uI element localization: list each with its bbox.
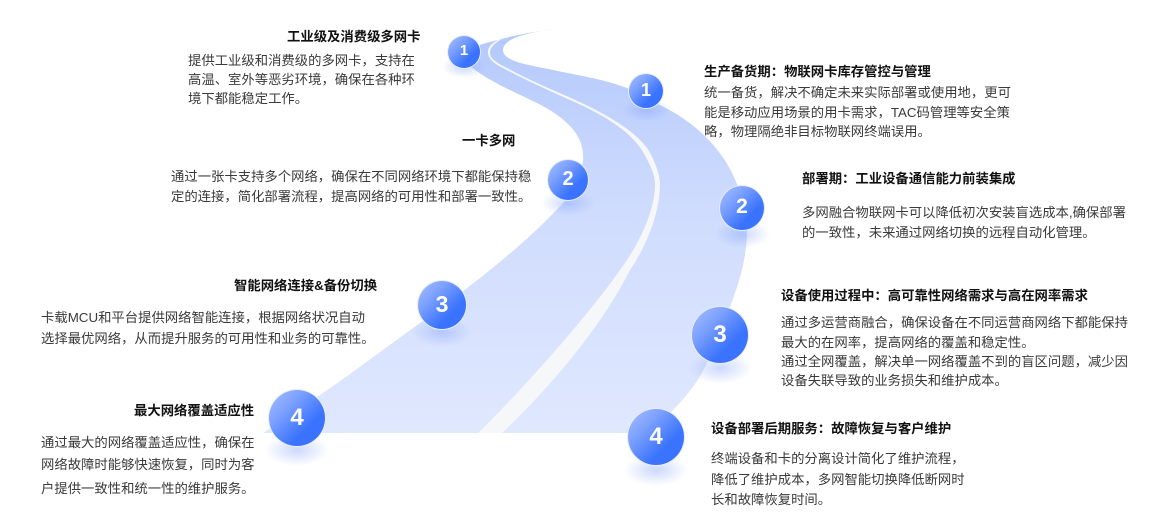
marker: right 4	[628, 409, 684, 465]
text block: 工业级及消费级多网卡: 工业级及消费级多网卡	[287, 29, 420, 44]
marker: left 3	[418, 281, 466, 329]
marker: right 2: 2	[736, 195, 748, 218]
text block: 工业级及消费级多网卡: 境下都能稳定工作。	[188, 91, 308, 106]
text block: 部署期: 多网融合物联网卡可以降低初次安装盲选成本,确保部署	[802, 205, 1126, 220]
text block: 智能网络连接&备份切换: 卡载MCU和平台提供网络智能连接，根据网络状况自动	[41, 310, 365, 325]
text block: 智能网络连接&备份切换	[41, 278, 377, 346]
text block: 最大网络覆盖适应性	[41, 403, 255, 496]
text block: 生产备货期: 生产备货期：物联网卡库存管控与管理	[704, 64, 931, 79]
text block: 部署期: 的一致性，未来通过网络切换的远程自动化管理。	[802, 225, 1096, 240]
text block: 设备使用过程中: 通过全网覆盖，解决单一网络覆盖不到的盲区问题，减少因	[781, 354, 1128, 369]
text block: 生产备货期: 统一备货，解决不确定未来实际部署或使用地，更可	[704, 85, 1011, 100]
marker shadows	[270, 62, 766, 484]
text block: 一卡多网	[171, 133, 531, 204]
text block: 最大网络覆盖适应性: 通过最大的网络覆盖适应性，确保在	[41, 435, 255, 450]
marker: right 1: 1	[641, 80, 651, 100]
text block: 工业级及消费级多网卡: 提供工业级和消费级的多网卡，支持在	[188, 53, 415, 68]
text block: 一卡多网: 定的连接，简化部署流程，提高网络的可用性和部署一致性。	[171, 189, 531, 204]
text block: 生产备货期: 略，物理隔绝非目标物联网终端误用。	[704, 124, 931, 139]
text block: 部署期	[802, 171, 1126, 240]
text block: 设备使用过程中	[781, 288, 1128, 388]
text block: 生产备货期: 能是移动应用场景的用卡需求，TAC码管理等安全策	[704, 105, 1010, 120]
text block: 部署期: 部署期：工业设备通信能力前装集成	[802, 171, 1016, 186]
text block: 设备使用过程中: 通过多运营商融合，确保设备在不同运营商网络下都能保持	[781, 315, 1128, 330]
text block: 工业级及消费级多网卡: 高温、室外等恶劣环境，确保在各种环	[188, 72, 415, 87]
marker: left 2: 2	[562, 168, 574, 190]
text block: 设备使用过程中: 最大的在网率，提高网络的覆盖和稳定性。	[781, 335, 1035, 350]
marker: right 2	[720, 186, 764, 230]
text block: 工业级及消费级多网卡	[188, 29, 420, 106]
marker: right 3	[692, 307, 748, 363]
marker: left 4	[269, 390, 325, 446]
text block: 一卡多网: 通过一张卡支持多个网络，确保在不同网络环境下都能保持稳	[171, 169, 531, 184]
marker: left 1: 1	[460, 42, 468, 59]
marker: right 3: 3	[713, 321, 727, 348]
marker: left 4: 4	[290, 404, 304, 431]
text block: 设备部署后期服务: 设备部署后期服务：故障恢复与客户维护	[711, 421, 951, 436]
marker: right 4: 4	[649, 423, 663, 450]
text block: 智能网络连接&备份切换: 选择最优网络，从而提升服务的可用性和业务的可靠性。	[41, 331, 375, 346]
marker: left 3: 3	[436, 291, 448, 317]
text block: 最大网络覆盖适应性: 户提供一致性和统一性的维护服务。	[41, 481, 255, 496]
text block: 生产备货期	[704, 64, 1011, 139]
text block: 最大网络覆盖适应性: 最大网络覆盖适应性	[134, 403, 254, 418]
text block: 智能网络连接&备份切换: 智能网络连接&备份切换	[234, 278, 377, 293]
text block: 设备使用过程中: 设备失联导致的业务损失和维护成本。	[781, 373, 1008, 388]
road centre stripe	[478, 37, 660, 433]
text block: 设备部署后期服务: 降低了维护成本，多网智能切换降低断网时	[711, 472, 965, 487]
text block: 设备部署后期服务: 终端设备和卡的分离设计简化了维护流程，	[711, 451, 965, 466]
marker: left 2	[548, 160, 588, 200]
text block: 设备使用过程中: 设备使用过程中：高可靠性网络需求与高在网率需求	[781, 288, 1088, 303]
text block: 设备部署后期服务	[711, 421, 965, 507]
text block: 一卡多网: 一卡多网	[462, 133, 515, 148]
text block: 最大网络覆盖适应性: 网络故障时能够快速恢复，同时为客	[41, 457, 255, 472]
road surface	[263, 29, 747, 433]
marker: right 1	[629, 74, 663, 108]
text block: 设备部署后期服务: 长和故障恢复时间。	[711, 492, 831, 507]
marker: left 1	[448, 36, 480, 68]
